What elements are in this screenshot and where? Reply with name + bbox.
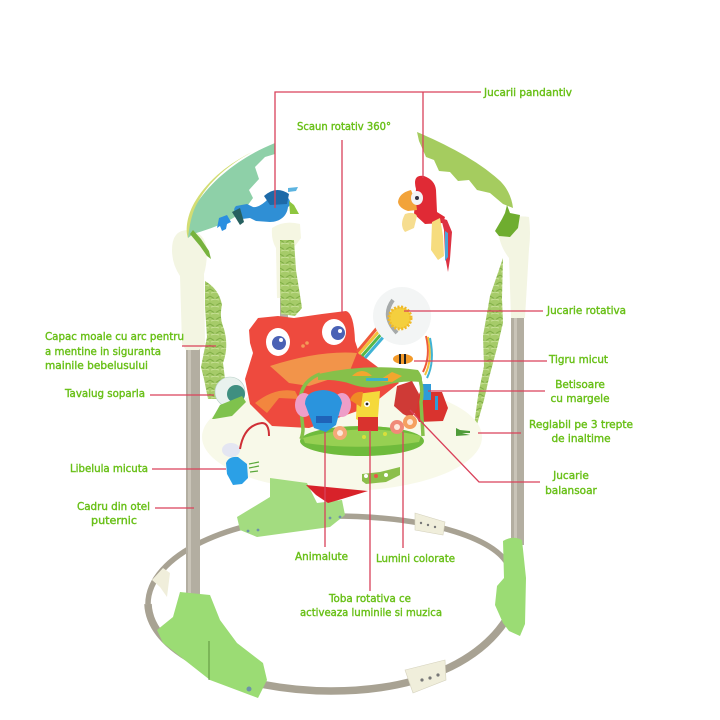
callout leader: Jucarie rotativa (404, 310, 543, 312)
centre stand (237, 478, 345, 537)
label: Jucarie balansoar: Jucarie (552, 470, 589, 482)
roller toy (212, 377, 246, 419)
left foot (157, 592, 267, 698)
label: Cadru din otel puternic: puternic (91, 515, 137, 527)
label: Reglabil pe 3 trepte (529, 419, 633, 445)
balancing toy (394, 381, 419, 418)
label: Toba rotativa (300, 593, 442, 619)
left frame pole (186, 345, 200, 595)
right pole cap (498, 216, 530, 318)
label: Jucarie balansoar: balansoar (545, 485, 598, 497)
clip: left (152, 568, 170, 597)
label: Tigru micut: Tigru micut (548, 354, 608, 366)
left pole cap (172, 230, 207, 350)
left ruffled spring cover (201, 281, 226, 399)
blue bird hanging toy (217, 187, 299, 231)
red seat fabric underside (306, 485, 368, 503)
callout leader: Libelula micuta (152, 468, 226, 470)
label: Jucarii pandantiv: Jucarii pandantiv (483, 87, 572, 99)
right foot (495, 538, 526, 636)
dragonfly toy (222, 423, 269, 485)
label: Jucarie rotativa: Jucarie rotativa (546, 305, 626, 317)
label: Capac moale (45, 331, 184, 372)
back support pole and ruffled cover (272, 223, 302, 320)
callout leader: Tavalug soparla (150, 394, 214, 396)
label: Cadru din otel puternic (77, 501, 150, 527)
small tiger toy (393, 354, 413, 364)
toucan toy (350, 391, 380, 431)
label: Capac moale: mainile bebelusului (45, 360, 148, 372)
label: Betisoare cu margele: Betisoare (555, 379, 605, 391)
rainbow (357, 328, 432, 378)
callout leader: Jucarii pandantiv (275, 92, 481, 208)
label: Betisoare cu margele (550, 379, 610, 405)
callout leader: Cadru din otel (155, 507, 194, 509)
steel base ring (148, 513, 510, 693)
label: Reglabil pe 3 trepte: de inaltime (551, 433, 611, 445)
callout leader: Toba rotativa (369, 430, 371, 591)
clip: front (405, 660, 446, 693)
callout leader: Betisoare (428, 390, 545, 392)
height adjuster (456, 428, 470, 436)
red parrot hanging toy (398, 176, 452, 272)
callout leader: Tigru micut (414, 360, 547, 362)
beads toy (413, 384, 448, 422)
label: Lumini colorate: Lumini colorate (376, 553, 455, 565)
callout leader: Animalute (324, 432, 326, 547)
activity bar base (300, 367, 424, 456)
clip: back (415, 513, 445, 535)
right ruffled spring cover (474, 258, 503, 428)
label: Capac moale: a mentine in siguranta (45, 346, 161, 358)
callout leader: Scaun rotativ (341, 140, 343, 313)
activity tray (202, 383, 482, 491)
label: Betisoare cu margele: cu margele (550, 393, 610, 405)
callout leader: Jucarie balansoar (410, 410, 540, 482)
right leaf canopy (417, 132, 520, 237)
label: Toba rotativa: Toba rotativa ce (328, 593, 411, 605)
left leaf canopy (187, 143, 275, 259)
label: Jucarie balansoar (545, 470, 598, 497)
label: Toba rotativa: activeaza luminile si muzica (300, 607, 442, 619)
label: Reglabil pe 3 trepte: Reglabil pe 3 trepte (529, 419, 633, 431)
label: Libelula micuta: Libelula micuta (70, 463, 148, 475)
label: Tavalug soparla: Tavalug soparla (64, 388, 145, 400)
spinning sun toy (373, 287, 431, 345)
right frame pole (511, 315, 524, 545)
label: Animalute: Animalute (295, 551, 348, 563)
callout leader: Capac moale (182, 345, 216, 347)
callout leader: Reglabil (478, 432, 521, 434)
elephant toy (295, 390, 351, 432)
callout leader: Lumini colorate (402, 432, 404, 548)
rotating drum (362, 467, 400, 484)
label: Cadru din otel puternic: Cadru din otel (77, 501, 150, 513)
seat with frog face (245, 311, 399, 428)
label: Capac moale: Capac moale cu arc pentru (45, 331, 184, 343)
label: Scaun rotativ 360: Scaun rotativ 360° (297, 121, 391, 133)
coloured lights (333, 415, 417, 440)
